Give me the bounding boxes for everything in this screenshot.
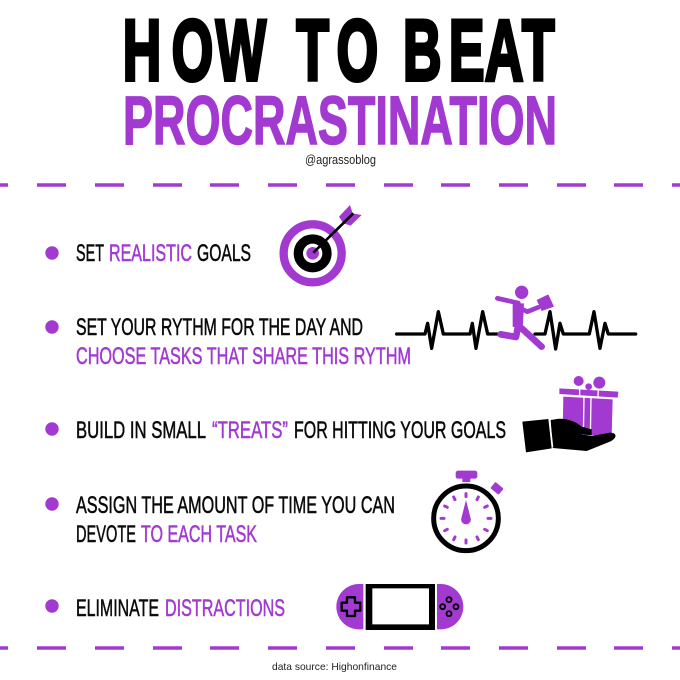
item: eliminate distractions	[45, 595, 285, 622]
icon: handheld game console	[336, 584, 463, 630]
title: how to beat: HOW	[123, 3, 266, 99]
footer: data source: data source: Highonfinance	[272, 661, 397, 673]
handle: agrassoblog: @agrassoblog	[305, 153, 376, 167]
item: build in small treats: FOR HITTING YOUR GOALS	[294, 417, 506, 444]
item: build in small treats	[45, 417, 506, 444]
item: set your rythm	[45, 314, 411, 370]
title: how to beat	[123, 3, 555, 99]
item: assign time: TO EACH TASK	[141, 521, 257, 548]
item: assign time: ASSIGN THE AMOUNT OF TIME YOU CAN	[76, 492, 395, 519]
item: build in small treats: BUILD IN SMALL	[76, 417, 206, 444]
icon: stopwatch	[434, 471, 504, 551]
item: eliminate distractions: ELIMINATE	[76, 595, 159, 622]
item: set your rythm: CHOOSE TASKS THAT SHARE THIS RYTHM	[76, 343, 411, 370]
icon: gift on hand	[522, 376, 618, 452]
item: set realistic goals: REALISTIC	[109, 240, 192, 267]
title: how to beat: TO	[296, 3, 378, 99]
item: assign time	[45, 492, 395, 548]
item: set realistic goals: SET	[76, 240, 104, 267]
item: build in small treats: “TREATS”	[212, 417, 288, 444]
icon: heartbeat line with running man	[397, 286, 636, 349]
item: eliminate distractions: DISTRACTIONS	[165, 595, 285, 622]
item: set realistic goals	[45, 240, 251, 267]
title: how to beat: BEAT	[403, 3, 555, 99]
item: set your rythm: SET YOUR RYTHM FOR THE DAY AND	[76, 314, 363, 341]
item: set realistic goals: GOALS	[197, 240, 251, 267]
item: assign time: DEVOTE	[76, 521, 136, 548]
icon: target with arrow	[284, 205, 362, 282]
